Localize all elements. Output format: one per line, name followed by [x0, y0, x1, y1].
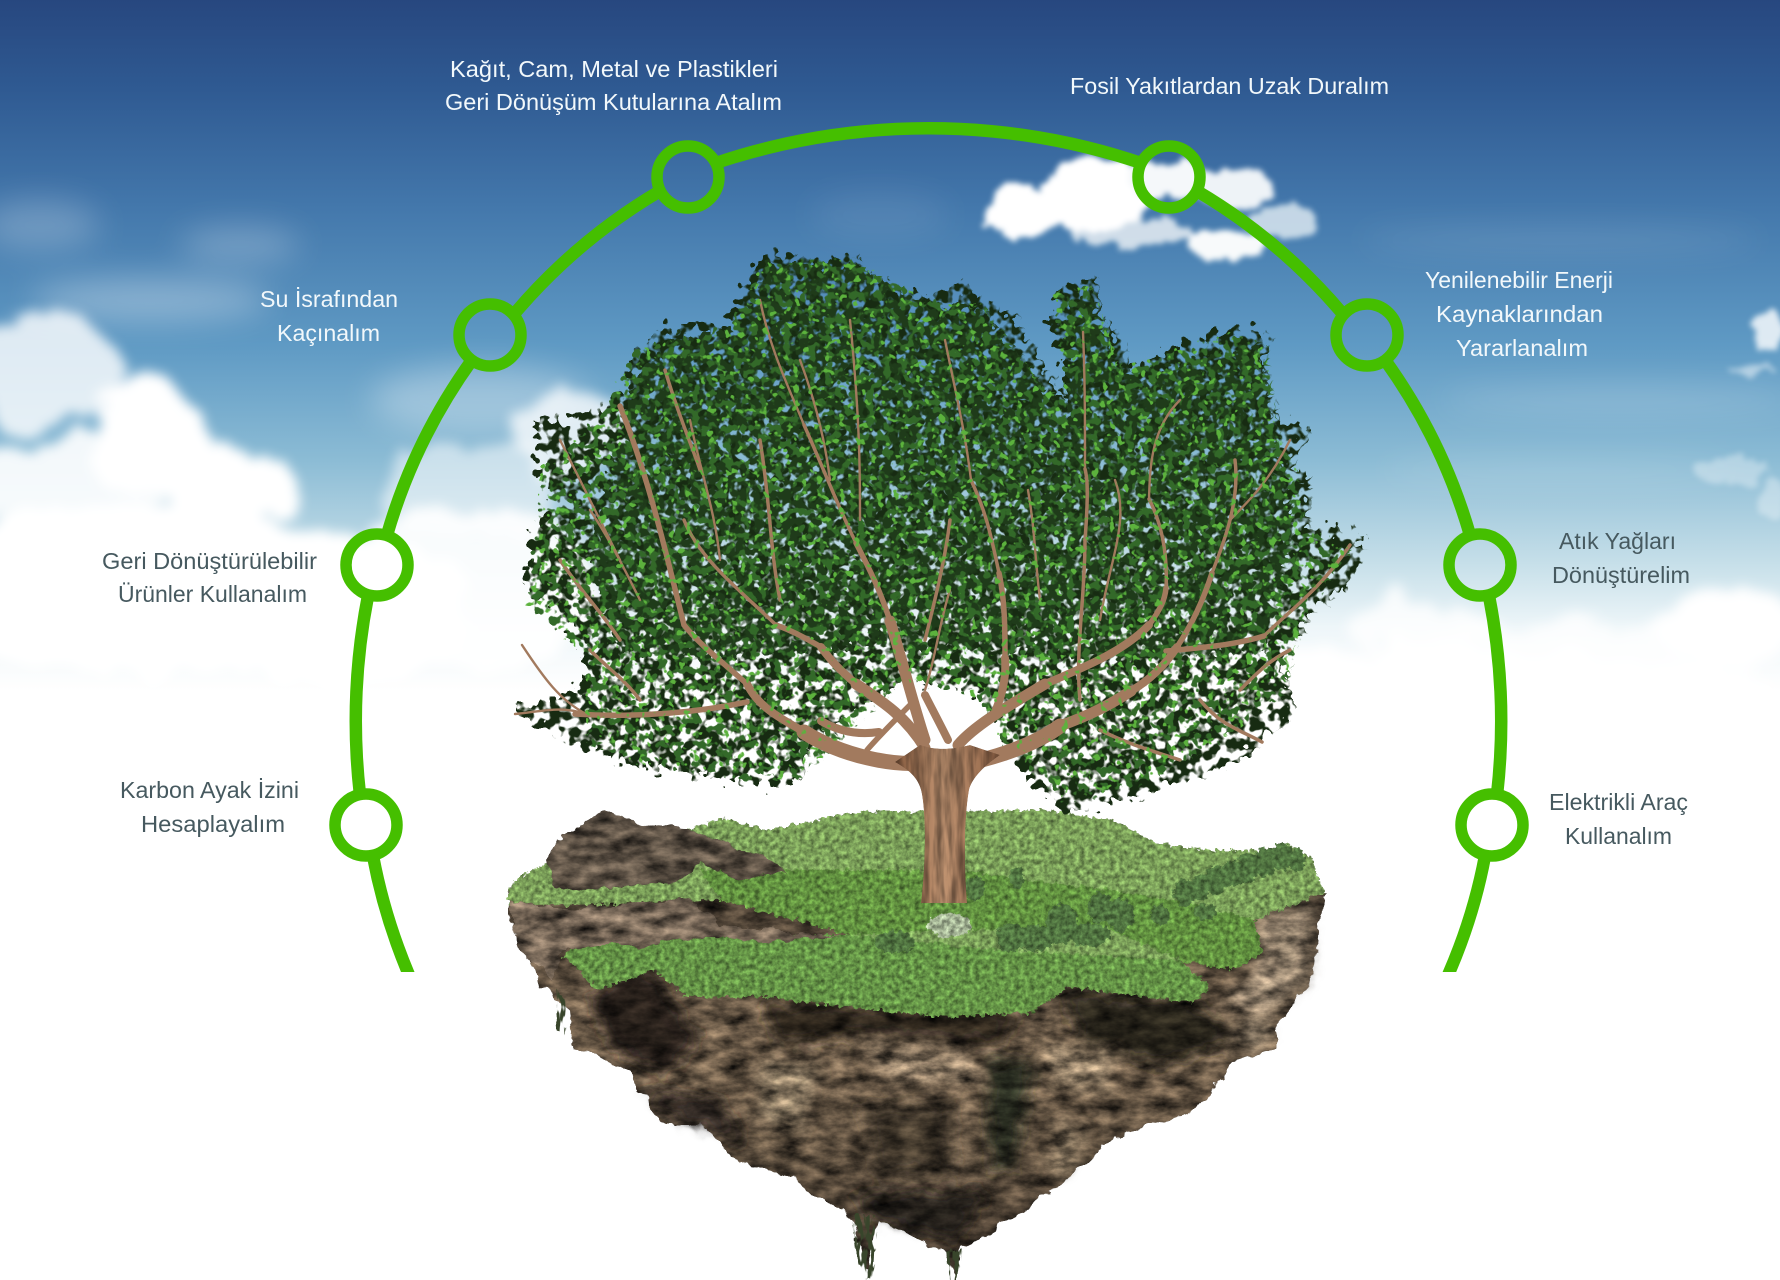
ring node: Elektrikli Araç [1461, 794, 1523, 856]
cloud: top centre cloud [986, 157, 1314, 260]
label: Su İsrafından Kaçınalım: Kaçınalım [277, 320, 380, 346]
label: Yenilenebilir Enerji Kaynaklarından Yararlanalım: Yenilenebilir Enerji [1425, 267, 1613, 293]
island lawn [508, 810, 1325, 1017]
label: Karbon Ayak İzini Hesaplayalım: Hesaplayalım [141, 811, 285, 837]
label: Geri Dönüştürülebilir Ürünler Kullanalım [102, 548, 317, 607]
canopy mid-green leaves [530, 260, 1355, 800]
label: Karbon Ayak İzini Hesaplayalım [120, 777, 299, 837]
tree branches [515, 300, 1350, 765]
tree [514, 251, 1370, 903]
label: Kağıt, Cam, Metal ve Plastikleri [445, 56, 782, 115]
label: Su İsrafından Kaçınalım [260, 286, 398, 346]
label: Atık Yağları Dönüştürelim: Atık Yağları [1559, 528, 1676, 554]
sky streaks [0, 191, 1780, 482]
ring node: Geri Dönüştürülebilir [346, 534, 408, 596]
green arc ring [335, 128, 1523, 982]
island bushes [875, 842, 1305, 953]
ring node: Kağıt Cam Metal [657, 146, 719, 208]
label: Kağıt, Cam, Metal ve Plastikleri: Kağıt, Cam, Metal ve Plastikleri [450, 56, 778, 82]
island rock ledge [508, 895, 839, 980]
label: Karbon Ayak İzini Hesaplayalım: Karbon Ayak İzini [120, 777, 299, 803]
label: Yenilenebilir Enerji Kaynaklarından Yararlanalım: Yararlanalım [1456, 335, 1588, 361]
label: Kağıt, Cam, Metal ve Plastikleri: Geri Dönüşüm Kutularına Atalım [445, 89, 782, 115]
label: Yenilenebilir Enerji Kaynaklarından Yararlanalım [1425, 267, 1613, 361]
island hanging vines [556, 990, 962, 1280]
ring node: Yenilenebilir Enerji [1336, 304, 1398, 366]
label: Geri Dönüştürülebilir Ürünler Kullanalım: Ürünler Kullanalım [118, 581, 307, 607]
island rock body [508, 890, 1325, 1280]
tree trunk [895, 745, 1000, 903]
ring node: Atık Yağları [1449, 534, 1511, 596]
ring node: Fosil Yakıtlardan [1138, 146, 1200, 208]
cloud: small right edge clouds [1692, 310, 1780, 522]
label: Atık Yağları Dönüştürelim [1552, 528, 1690, 588]
label: Fosil Yakıtlardan Uzak Duralım: Fosil Yakıtlardan Uzak Duralım [1070, 73, 1389, 99]
canopy bright-green leaves [530, 260, 1355, 800]
island boulder [547, 810, 789, 888]
label: Elektrikli Araç Kullanalım: Kullanalım [1565, 823, 1672, 849]
label: Elektrikli Araç Kullanalım [1549, 789, 1688, 849]
canopy back layer [514, 251, 1370, 813]
floating island [508, 810, 1325, 1280]
ring node: Karbon Ayak İzini [335, 794, 397, 856]
clouds: right bank [1020, 592, 1780, 750]
label: Atık Yağları Dönüştürelim: Dönüştürelim [1552, 562, 1690, 588]
ring node: Su İsrafından [459, 304, 521, 366]
canopy dense upper layer [590, 265, 1295, 660]
label: Yenilenebilir Enerji Kaynaklarından Yararlanalım: Kaynaklarından [1436, 301, 1603, 327]
label: Elektrikli Araç Kullanalım: Elektrikli Araç [1549, 789, 1688, 815]
label: Su İsrafından Kaçınalım: Su İsrafından [260, 286, 398, 312]
clouds: left bank [0, 315, 640, 690]
label: Geri Dönüştürülebilir Ürünler Kullanalım: Geri Dönüştürülebilir [102, 548, 317, 574]
